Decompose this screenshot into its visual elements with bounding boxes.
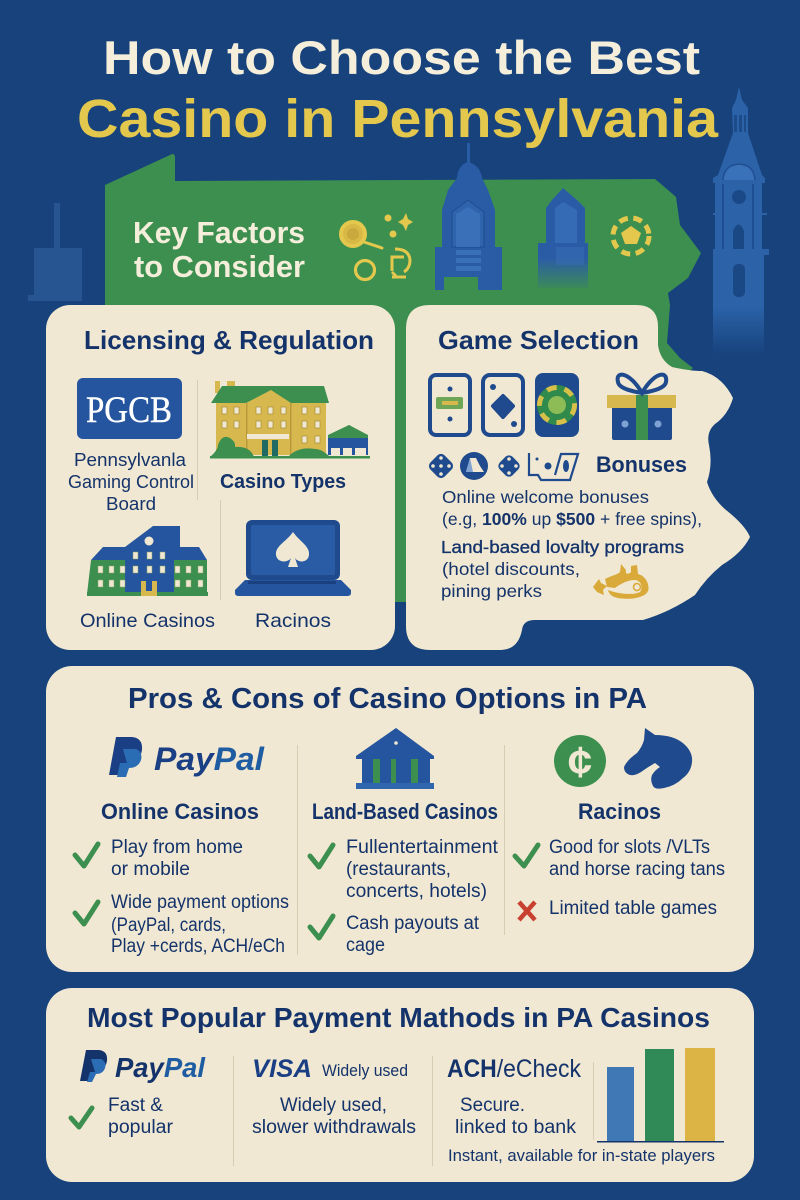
list: racino pros and cons: [515, 837, 725, 920]
list: land-based pros: Fullentertainment: [346, 837, 499, 858]
subhead: land-based casinos: Land-Based Casinos: [312, 799, 498, 824]
icon: hotel casino: [210, 381, 370, 458]
title: Casino in Pennsylvania: [77, 89, 719, 149]
icon: PayPal logo small: [80, 1050, 206, 1083]
text: ach note: Secure.: [460, 1095, 525, 1116]
list: land-based pros: (restaurants,: [346, 859, 451, 880]
list: land-based pros: cage: [346, 935, 385, 956]
list: online casino pros: [75, 837, 289, 957]
icon: playing card: [483, 375, 523, 435]
text: bonus details: Land-based lovalty programs: [441, 537, 684, 557]
icon: gold dining perk: [593, 564, 649, 599]
list: online casino pros: Play +cerds, ACH/eCh: [111, 936, 285, 957]
text: gaming control board: Pennsylvanla: [74, 450, 187, 470]
text: bonus details: (hotel discounts,: [442, 559, 580, 579]
label: racinos: Racinos: [255, 610, 331, 632]
text: visa note: Widely used,: [280, 1095, 387, 1116]
list: online casino pros: or mobile: [111, 859, 190, 880]
icon: gift box: [607, 375, 676, 440]
label: online casinos: Online Casinos: [80, 610, 215, 632]
text: widely used tag: Widely used: [322, 1061, 408, 1080]
text: bonus details: Online welcome bonuses: [442, 487, 649, 507]
icon: dice and chips row: [427, 452, 578, 480]
subhead: online casinos: Online Casinos: [101, 799, 259, 824]
icon: coin: [554, 735, 606, 787]
list: online casino pros: Wide payment options: [111, 892, 289, 913]
text: gaming control board: Gaming Control: [68, 472, 194, 492]
icon: chip card: [535, 373, 579, 437]
title: How to Choose the Best: [103, 31, 700, 84]
text: gaming control board: Board: [106, 494, 156, 514]
icon: PayPal logo: [109, 737, 265, 777]
icon: PGCB logo: [77, 378, 182, 439]
text: visa note: [252, 1095, 416, 1138]
icon: magnifier and sparkles: [341, 213, 413, 280]
list: racino pros and cons: Good for slots /VLTs: [549, 837, 710, 858]
icon: center building one: [435, 143, 502, 290]
logo: ACH eCheck: ACH/eCheck: [447, 1055, 581, 1083]
icon: PayPal logo small: PayPal: [115, 1052, 206, 1083]
panel: licensing and regulation: [46, 305, 395, 650]
text: gaming control board: [68, 450, 194, 514]
heading: bonuses: Bonuses: [596, 452, 687, 477]
title: [77, 31, 719, 149]
heading: licensing: Licensing & Regulation: [84, 325, 374, 355]
list: land-based pros: Cash payouts at: [346, 913, 480, 934]
heading: key factors: Key Factors: [133, 215, 305, 250]
subhead: racinos: Racinos: [578, 799, 661, 824]
icon: PGCB logo: PGCB: [86, 390, 172, 431]
icon: left skyline building: [28, 203, 82, 301]
map: Pennsylvania state shape: [105, 154, 701, 602]
text: paypal note: popular: [108, 1117, 174, 1138]
text: bonus details: (e.g, 100% up $500 + free spins),: [442, 509, 702, 529]
text: paypal note: Fast &: [108, 1095, 163, 1116]
bar chart: [597, 1048, 724, 1142]
label: casino types: Casino Types: [220, 471, 346, 493]
logo: visa: VISA: [252, 1055, 312, 1083]
text: ach note: linked to bank: [455, 1117, 577, 1138]
icon: PayPal logo: PayPal: [154, 741, 265, 777]
list: land-based pros: [310, 837, 499, 956]
text: paypal note: [108, 1095, 174, 1138]
list: racino pros and cons: Limited table games: [549, 898, 717, 919]
text: ach note: [455, 1095, 577, 1138]
icon: horse head: [624, 728, 692, 789]
heading: game selection: Game Selection: [438, 325, 639, 355]
list: online casino pros: (PayPal, cards,: [111, 915, 226, 936]
icon: bank building: [356, 728, 434, 789]
text: bonus details: [441, 487, 702, 601]
icon: check mark: [71, 1108, 92, 1127]
icon: laptop with spade: [235, 520, 351, 596]
icon: coin: ¢: [568, 738, 592, 787]
heading: key factors: to Consider: [134, 249, 305, 284]
panel: game selection and bonuses: [406, 305, 750, 650]
text: visa note: slower withdrawals: [252, 1117, 416, 1138]
list: racino pros and cons: and horse racing tans: [549, 859, 725, 880]
icon: online casino building: [87, 526, 208, 596]
heading: pros and cons: Pros & Cons of Casino Options in PA: [128, 683, 647, 715]
panel: pros and cons: [46, 666, 754, 972]
icon: center building two: [538, 188, 588, 288]
list: land-based pros: concerts, hotels): [346, 881, 487, 902]
heading: key factors: [133, 215, 305, 284]
text: instant availability: Instant, available for in-state players: [448, 1146, 715, 1165]
icon: slot card: [430, 375, 470, 435]
list: online casino pros: Play from home: [111, 837, 243, 858]
icon: right tower: [713, 87, 769, 355]
heading: payment methods: Most Popular Payment Mathods in PA Casinos: [87, 1002, 710, 1033]
icon: poker chip outline: [613, 218, 649, 254]
text: bonus details: pining perks: [441, 581, 542, 601]
panel: payment methods: [46, 988, 754, 1182]
